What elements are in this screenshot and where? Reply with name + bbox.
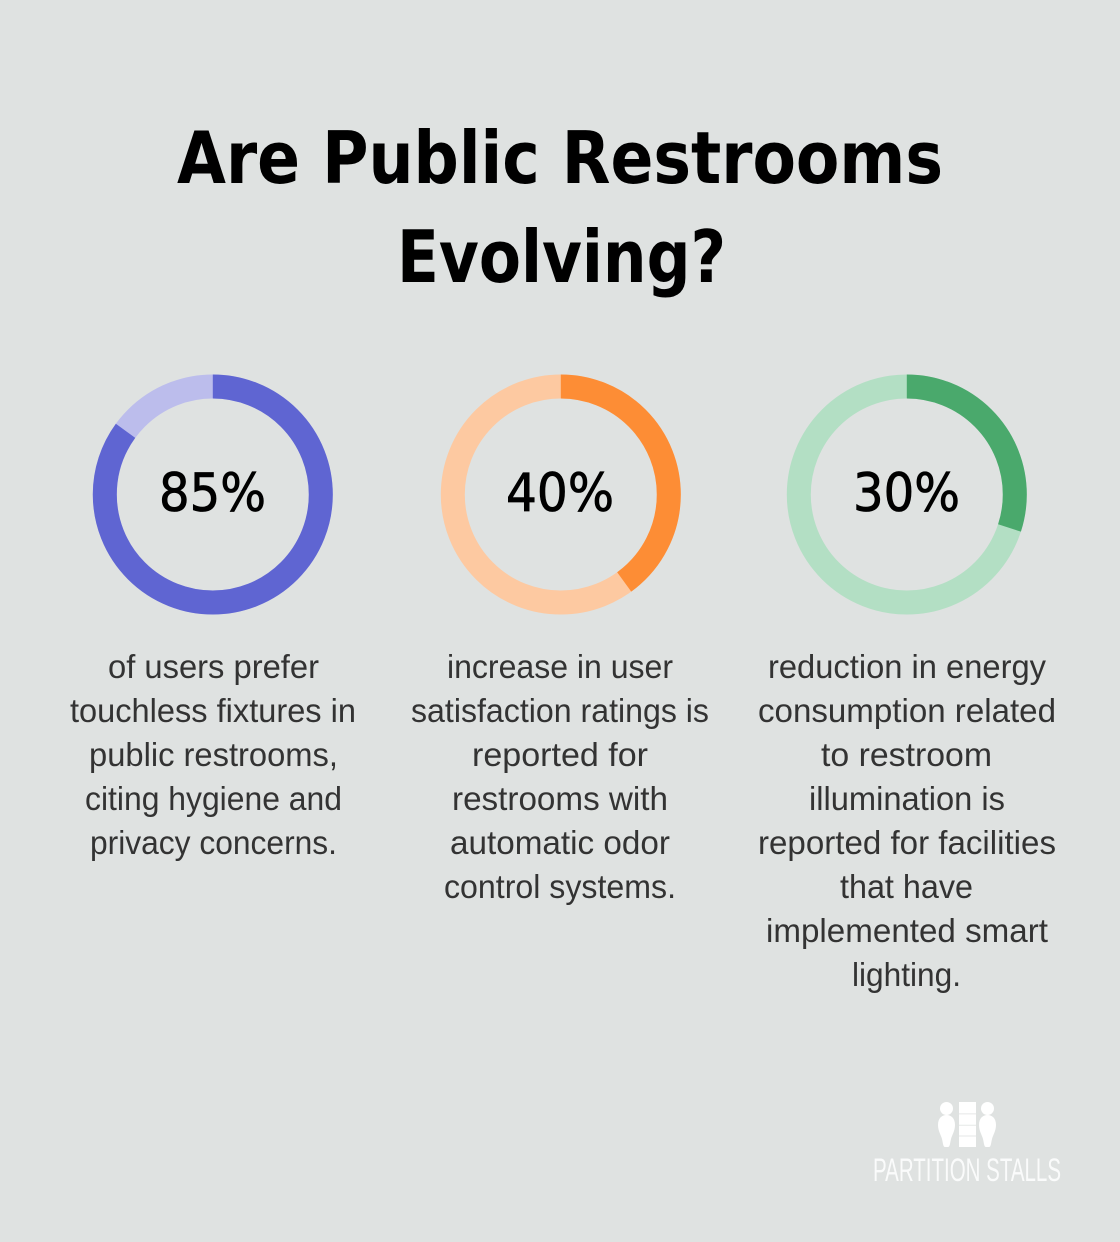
- donut chart: 40%: [453, 386, 669, 602]
- description: energy reduction: to restroom: [821, 736, 992, 773]
- description: user satisfaction: increase in user: [447, 648, 673, 685]
- description: touchless fixtures: touchless fixtures in: [70, 692, 356, 729]
- description: user satisfaction: reported for: [472, 736, 648, 773]
- description: user satisfaction: satisfaction ratings is: [411, 692, 709, 729]
- description: touchless fixtures: citing hygiene and: [85, 780, 342, 817]
- panel: 30% energy reduction: [758, 386, 1056, 993]
- donut chart: 30%: [799, 386, 1015, 602]
- description: touchless fixtures: [70, 648, 356, 861]
- description: touchless fixtures: privacy concerns.: [90, 824, 337, 861]
- stat: 85%: 85%: [159, 463, 266, 524]
- description: energy reduction: consumption related: [758, 692, 1056, 729]
- description: energy reduction: that have: [840, 868, 973, 905]
- panel: 40% user satisfaction: [411, 386, 709, 905]
- description: energy reduction: illumination is: [809, 780, 1005, 817]
- description: touchless fixtures: of users prefer: [108, 648, 319, 685]
- title: Evolving?: [397, 215, 726, 299]
- description: user satisfaction: automatic odor: [450, 824, 670, 861]
- logo: Partition Stalls: [873, 1102, 1061, 1188]
- icon: right figure: [979, 1102, 996, 1147]
- description: user satisfaction: [411, 648, 709, 905]
- description: energy reduction: [758, 648, 1056, 993]
- panel: 85% touchless fixtures: [70, 386, 356, 861]
- stat: 30%: 30%: [853, 463, 960, 524]
- description: energy reduction: lighting.: [852, 956, 961, 993]
- icon: left figure: [938, 1102, 955, 1147]
- stat: 40%: 40%: [506, 463, 614, 524]
- description: user satisfaction: restrooms with: [452, 780, 668, 817]
- description: touchless fixtures: public restrooms,: [89, 736, 338, 773]
- description: energy reduction: reduction in energy: [768, 648, 1046, 685]
- title: Are Public Restrooms: [177, 116, 943, 200]
- title: [177, 116, 943, 299]
- donut chart: 85%: [105, 386, 321, 602]
- icon: stall: [959, 1102, 976, 1147]
- description: energy reduction: implemented smart: [766, 912, 1048, 949]
- description: user satisfaction: control systems.: [444, 868, 676, 905]
- description: energy reduction: reported for facilities: [758, 824, 1056, 861]
